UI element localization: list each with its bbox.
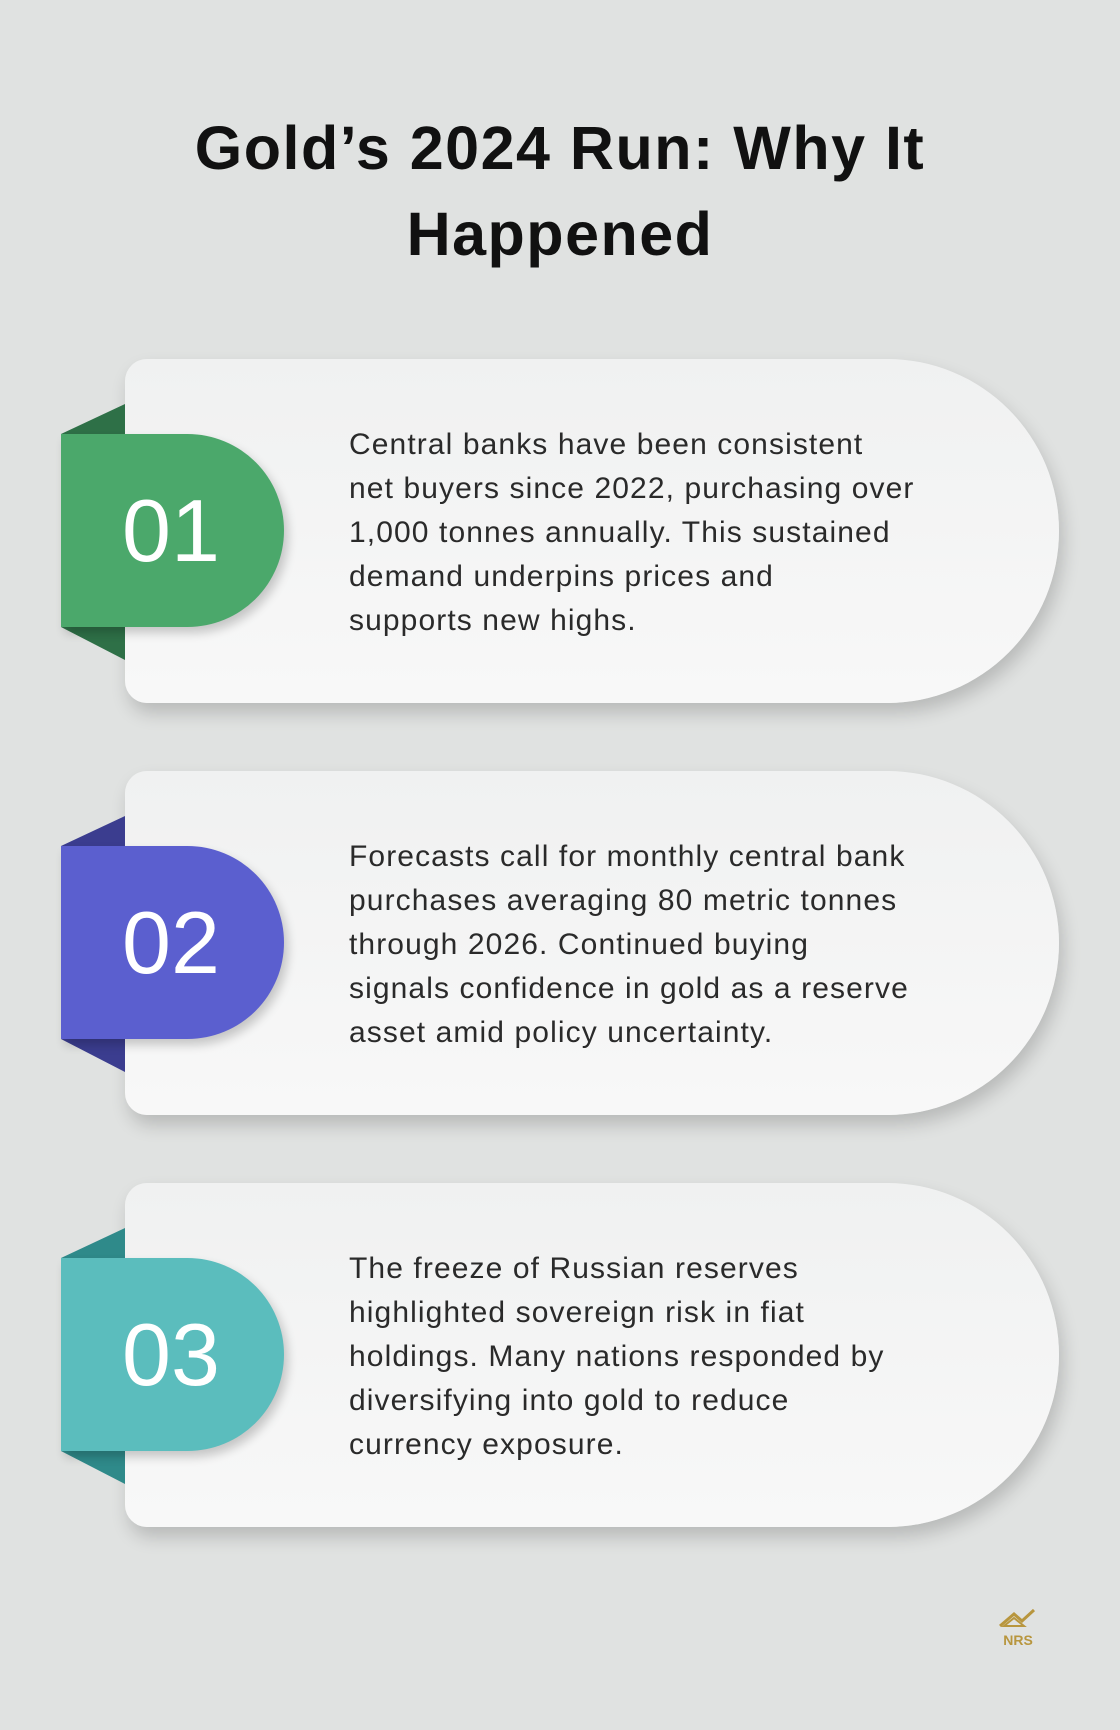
card 02 bbox=[125, 771, 1059, 1115]
badge 03: 03 bbox=[122, 1305, 220, 1404]
text 03: holdings. Many nations responded by bbox=[349, 1340, 884, 1373]
logo: NRS bbox=[999, 1609, 1035, 1648]
text 02: through 2026. Continued buying bbox=[349, 928, 809, 961]
panel: item 03 bbox=[61, 1183, 1070, 1544]
fold 02 bbox=[61, 816, 125, 1072]
text 02: purchases averaging 80 metric tonnes bbox=[349, 884, 897, 917]
card 01 bbox=[125, 359, 1059, 703]
text 01: supports new highs. bbox=[349, 604, 637, 637]
text 02: Forecasts call for monthly central bank bbox=[349, 840, 905, 873]
text 01: Central banks have been consistent bbox=[349, 428, 863, 461]
badge 01 bbox=[61, 434, 284, 627]
text 01: 1,000 tonnes annually. This sustained bbox=[349, 516, 891, 549]
fold 03 bbox=[61, 1228, 125, 1484]
badge 01: 01 bbox=[122, 481, 220, 580]
text 02 bbox=[349, 840, 909, 1049]
text 03: The freeze of Russian reserves bbox=[349, 1252, 799, 1285]
text 01: demand underpins prices and bbox=[349, 560, 774, 593]
logo: NRS: NRS bbox=[1003, 1632, 1033, 1648]
badge 03 bbox=[61, 1258, 284, 1451]
panel: item 01 bbox=[61, 359, 1070, 720]
text 03 bbox=[349, 1252, 884, 1461]
text 01 bbox=[349, 428, 914, 637]
badge 02 bbox=[61, 846, 284, 1039]
text 03: diversifying into gold to reduce bbox=[349, 1384, 789, 1417]
title bbox=[195, 114, 925, 268]
title: Gold’s 2024 Run: Why It bbox=[195, 114, 925, 182]
text 02: asset amid policy uncertainty. bbox=[349, 1016, 773, 1049]
text 01: net buyers since 2022, purchasing over bbox=[349, 472, 914, 505]
text 03: currency exposure. bbox=[349, 1428, 624, 1461]
badge 02: 02 bbox=[122, 893, 220, 992]
fold 01 bbox=[61, 404, 125, 660]
text 03: highlighted sovereign risk in fiat bbox=[349, 1296, 805, 1329]
text 02: signals confidence in gold as a reserve bbox=[349, 972, 909, 1005]
title: Happened bbox=[407, 200, 713, 268]
card 03 bbox=[125, 1183, 1059, 1527]
panel: item 02 bbox=[61, 771, 1070, 1132]
